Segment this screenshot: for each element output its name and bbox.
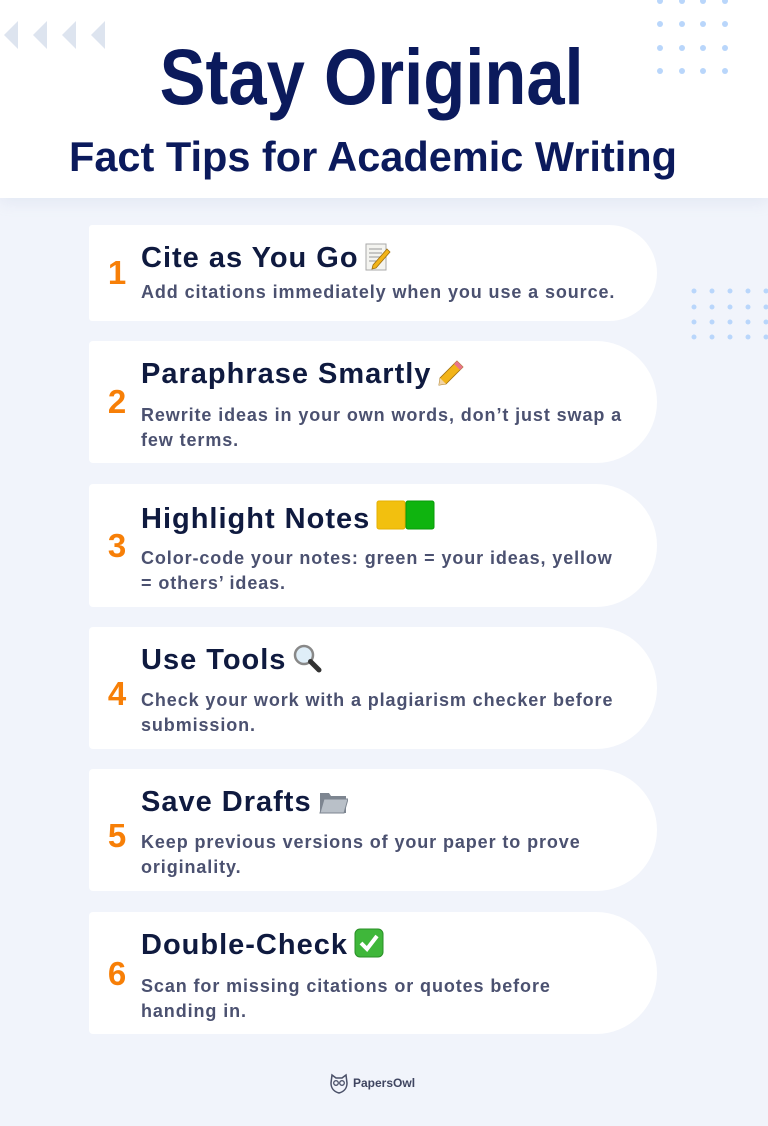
header band <box>0 0 768 198</box>
number 3: 3 <box>108 527 126 564</box>
title 5 with folder icon: Save Drafts <box>141 786 312 818</box>
description 2: Rewrite ideas in your own words, don’t just swap a <box>141 405 622 425</box>
description 6: Scan for missing citations or quotes before <box>141 976 551 996</box>
number 5: 5 <box>108 817 126 854</box>
description 6 <box>141 976 551 1021</box>
description 4 <box>141 690 613 735</box>
description 5: Keep previous versions of your paper to prove <box>141 832 581 852</box>
title 4 with magnifier icon: Use Tools <box>141 644 286 676</box>
card 1 <box>89 225 657 321</box>
footer logo <box>330 1074 415 1094</box>
description 3: Color-code your notes: green = your ideas, yellow <box>141 548 613 568</box>
dot grid top right <box>657 0 728 74</box>
title 1 with memo icon: Cite as You Go <box>141 242 359 274</box>
title 3 with color squares: Highlight Notes <box>141 503 370 535</box>
description 1: Add citations immediately when you use a source. <box>141 282 615 302</box>
description 4: Check your work with a plagiarism checker before <box>141 690 613 710</box>
description 2 <box>141 405 622 450</box>
description 3: = others’ ideas. <box>141 573 286 593</box>
dot grid right middle <box>692 288 768 340</box>
card 6 <box>89 912 657 1034</box>
description 3 <box>141 548 613 593</box>
title 2 with pencil icon: Paraphrase Smartly <box>141 358 431 390</box>
decorative arrows <box>4 21 105 49</box>
number 1: 1 <box>108 254 126 291</box>
description 5: originality. <box>141 857 241 877</box>
brand name: PapersOwl <box>353 1076 415 1090</box>
number 6: 6 <box>108 955 126 992</box>
subtitle: Fact Tips for Academic Writing <box>69 133 677 180</box>
title: Stay Original <box>160 32 584 121</box>
number 4: 4 <box>108 675 126 712</box>
icon: owl <box>330 1074 348 1094</box>
description 2: few terms. <box>141 430 239 450</box>
description 5 <box>141 832 581 877</box>
card 2 <box>89 341 657 463</box>
card 5 <box>89 769 657 891</box>
card 4 <box>89 627 657 749</box>
card 3 <box>89 484 657 607</box>
number 2: 2 <box>108 383 126 420</box>
title 6 with check icon: Double-Check <box>141 929 348 961</box>
description 6: handing in. <box>141 1001 247 1021</box>
description 4: submission. <box>141 715 256 735</box>
